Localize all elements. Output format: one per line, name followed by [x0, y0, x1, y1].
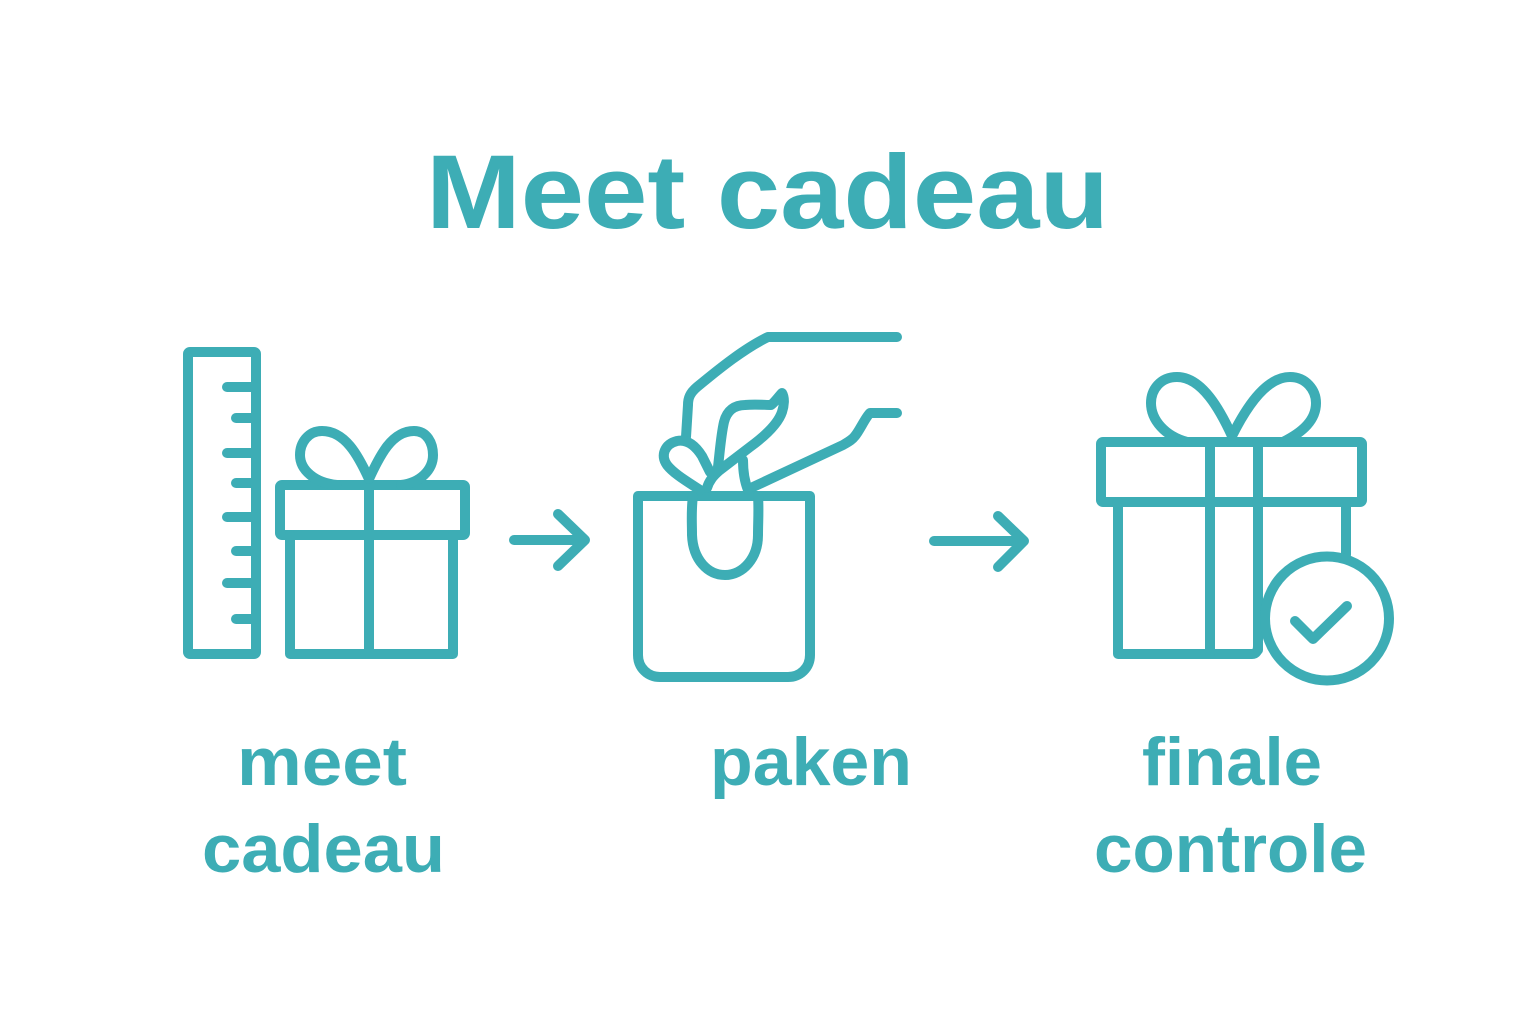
label: step 3: controle	[1094, 811, 1367, 887]
icon: check badge	[1265, 556, 1389, 680]
icon: ruler	[188, 352, 256, 654]
icon: ruler and gift	[188, 352, 465, 654]
icon: large gift box	[1101, 377, 1362, 654]
icon: ribbon loop	[664, 441, 710, 490]
arrow: measure to pack	[514, 514, 585, 566]
label: step 2: paken	[710, 724, 912, 800]
icon: hand	[686, 337, 897, 490]
label: step 1: meet	[237, 724, 407, 800]
label: step 3: finale	[1142, 724, 1322, 800]
title: Meet cadeau	[426, 134, 1109, 251]
icon: hand placing gift in bag	[638, 337, 897, 677]
icon: bag	[638, 496, 810, 677]
label: step 1: cadeau	[202, 811, 445, 887]
arrow: pack to final check	[934, 516, 1024, 567]
label: step 1	[202, 724, 445, 887]
icon: small gift box	[280, 431, 465, 654]
icon: bag handle	[692, 496, 758, 575]
icon: gift with check mark	[1101, 377, 1389, 680]
label: step 3	[1094, 724, 1367, 887]
